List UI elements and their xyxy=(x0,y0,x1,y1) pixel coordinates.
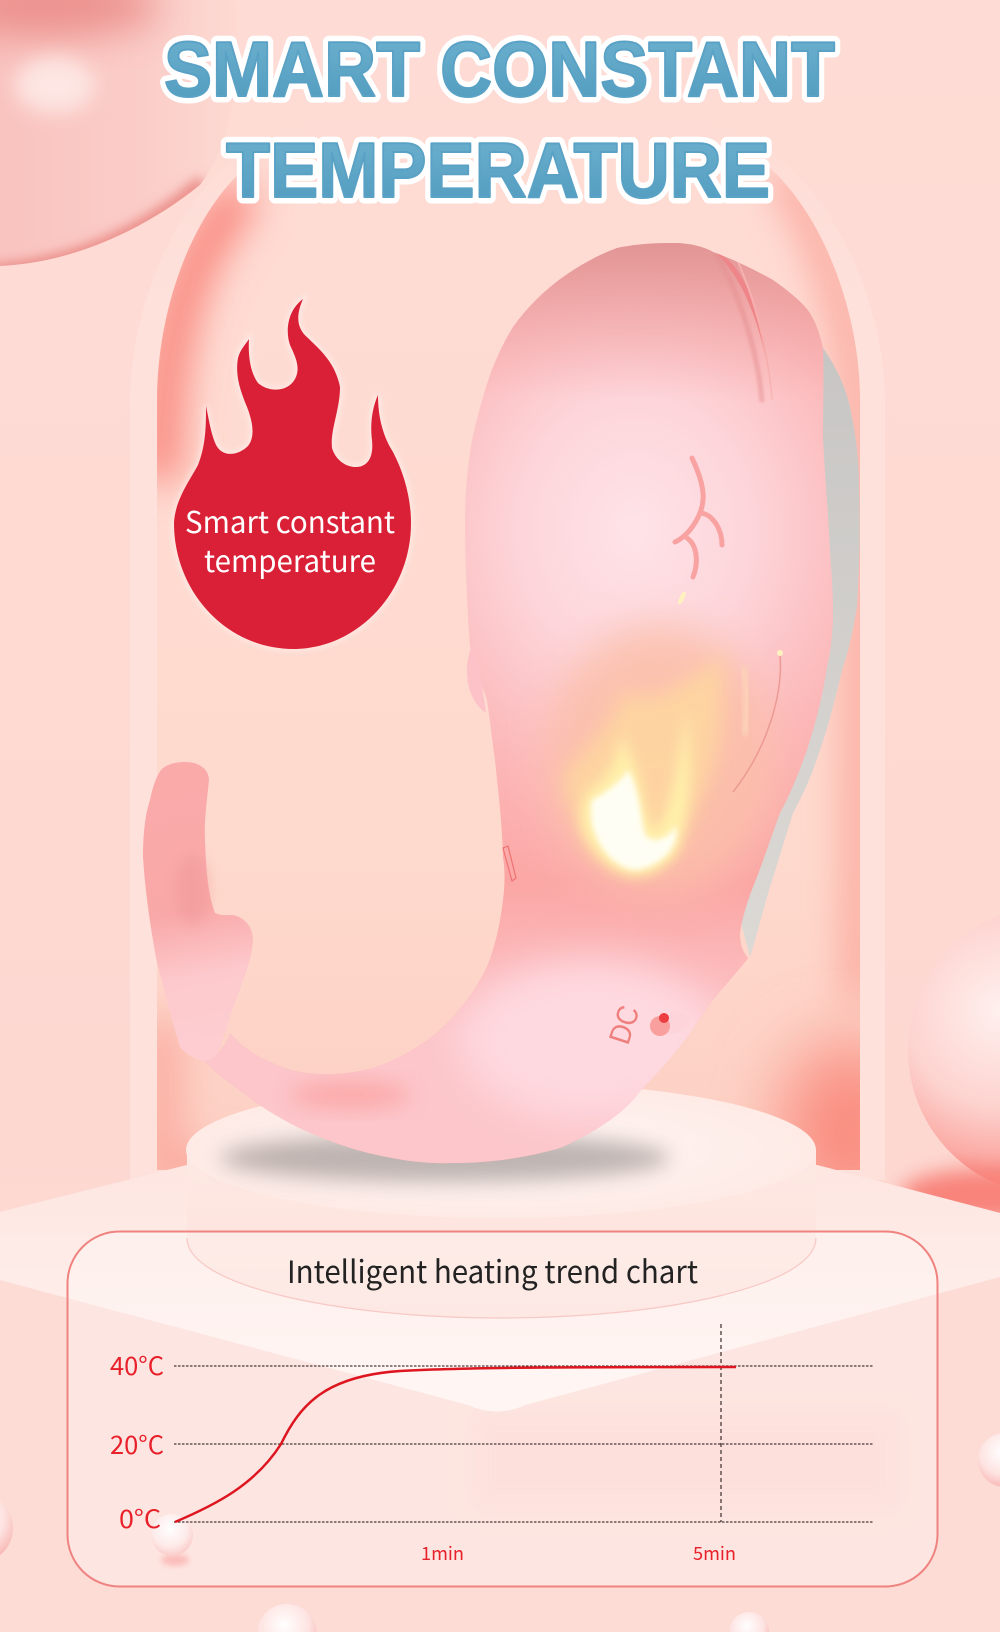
device: DC label: DC xyxy=(603,1002,646,1048)
y-axis labels xyxy=(110,1347,164,1536)
device: sparks xyxy=(677,591,783,656)
badge: flame shape xyxy=(174,299,411,649)
title: SMART CONSTANT xyxy=(164,25,835,113)
device: small side mark xyxy=(503,846,516,881)
title: TEMPERATURE xyxy=(226,126,770,214)
arch: outer xyxy=(130,120,885,1180)
device xyxy=(143,230,860,1180)
x-axis labels: 1min xyxy=(421,1540,464,1566)
device: lower body tone xyxy=(204,912,748,1164)
badge: flame xyxy=(174,299,411,649)
panel: heating trend chart xyxy=(68,1232,938,1586)
device: body xyxy=(190,230,850,1180)
floor xyxy=(0,1165,1000,1632)
badge: label: temperature xyxy=(204,537,376,581)
title xyxy=(164,25,835,214)
device: tail fin xyxy=(143,762,253,1061)
pedestal xyxy=(186,1082,816,1318)
device: grey strip xyxy=(735,348,860,957)
badge: label: Smart constant xyxy=(185,498,395,542)
device: inner curve shading xyxy=(290,1081,410,1109)
arch: inner xyxy=(157,168,860,1170)
badge: halo xyxy=(174,299,411,649)
device: antler mark xyxy=(675,458,722,577)
floor: box side xyxy=(472,1412,900,1510)
ball: top left xyxy=(0,0,208,266)
device: flame xyxy=(563,650,747,876)
x-axis labels: 5min xyxy=(693,1540,736,1566)
device: charging port xyxy=(650,1008,693,1038)
chart curve xyxy=(175,1367,736,1522)
chart gridlines xyxy=(174,1324,874,1522)
title: TEMPERATURE xyxy=(226,126,770,214)
y-axis labels: 40°C xyxy=(110,1347,164,1383)
title: SMART CONSTANT xyxy=(164,25,835,113)
x-axis labels xyxy=(421,1540,736,1566)
y-axis labels: 0°C xyxy=(119,1500,161,1536)
chart title: Intelligent heating trend chart xyxy=(287,1247,698,1292)
device: heat glow xyxy=(545,625,775,895)
device: lower pale area xyxy=(460,960,720,1120)
device: fin shading xyxy=(174,854,210,926)
floor: right red glow xyxy=(900,1169,1000,1221)
y-axis labels: 20°C xyxy=(110,1426,164,1462)
ball: right xyxy=(908,905,1000,1195)
device: side fin xyxy=(467,645,486,713)
pearls xyxy=(0,1433,1000,1632)
device: seam xyxy=(733,655,780,792)
device: groove xyxy=(715,252,772,402)
floor: light top surface xyxy=(0,1165,1000,1412)
